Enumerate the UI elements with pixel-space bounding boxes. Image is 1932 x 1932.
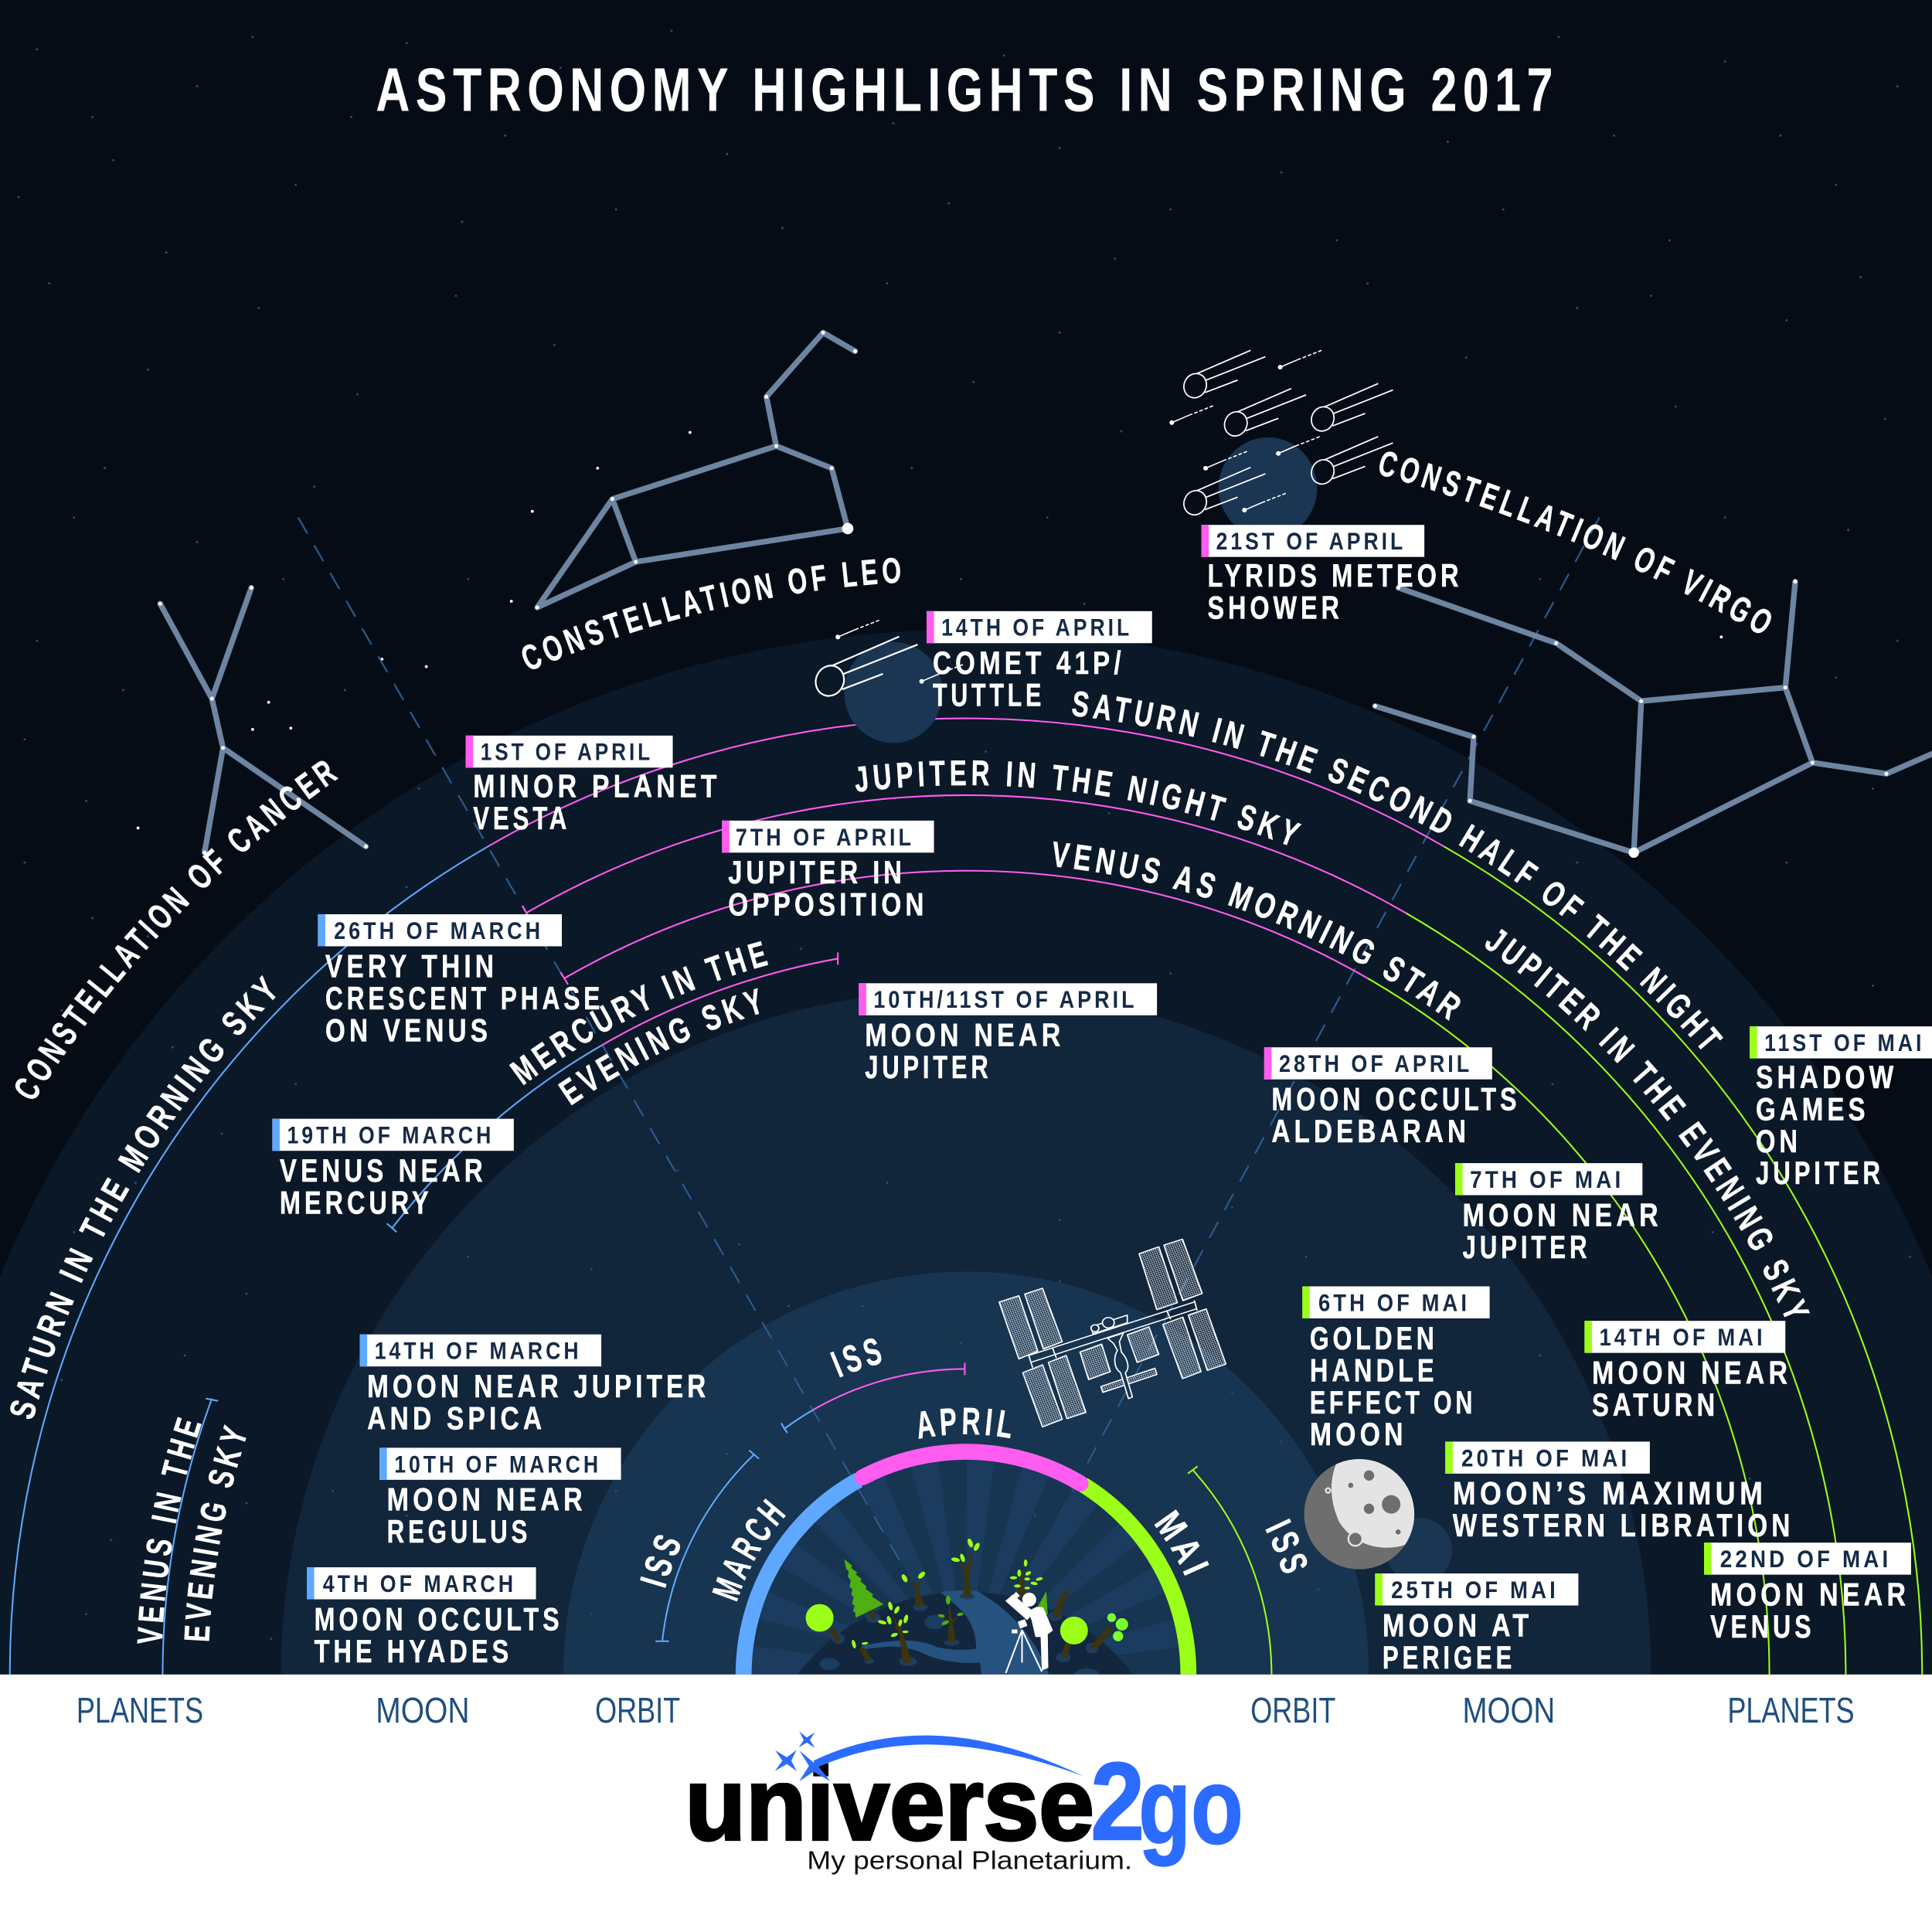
event: 7th of April: JUPITER IN xyxy=(728,854,906,890)
white footer area xyxy=(0,1675,1932,1932)
event: 7th of Mai xyxy=(1455,1163,1662,1265)
curved label: constellation of Virgo: CONSTELLATION OF VIRGO xyxy=(1379,451,1771,634)
title: ASTRONOMY HIGHLIGHTS IN SPRING 2017 xyxy=(376,55,1559,124)
curved label: Mercury evening sky, line one: MERCURY IN THE xyxy=(509,941,768,1085)
arc: Venus evening sky xyxy=(162,1399,218,1675)
logo tagline: My personal Planetarium. xyxy=(807,1847,1132,1876)
event: 10th/11st of April: JUPITER xyxy=(865,1049,992,1085)
event: 4th of March: MOON OCCULTS xyxy=(315,1600,563,1637)
event: 22nd of Mai: VENUS xyxy=(1710,1608,1815,1645)
event: 26th of March: VERY THIN xyxy=(325,947,498,984)
event: 25th of Mai: 25TH OF MAI xyxy=(1391,1576,1559,1604)
event: 25th of Mai: PERIGEE xyxy=(1383,1639,1515,1675)
ring: April xyxy=(862,1452,1080,1484)
event: 19th of March: 19TH OF MARCH xyxy=(287,1121,494,1149)
dashed month divider: April / May xyxy=(1032,518,1600,1565)
event: 10th/11st of April: 10TH/11ST OF APRIL xyxy=(873,985,1138,1013)
highlight disc: Lyrids radiant xyxy=(1219,437,1317,539)
event: 14th of March xyxy=(360,1335,709,1436)
event: 10th of March xyxy=(379,1447,621,1549)
event: 7th of April: OPPOSITION xyxy=(728,886,928,923)
arc: ISS May xyxy=(1188,1466,1271,1675)
event: 7th of Mai: 7TH OF MAI xyxy=(1470,1165,1624,1193)
event: 14th of Mai xyxy=(1584,1321,1791,1423)
event: 26th of March: CRESCENT PHASE xyxy=(325,980,604,1016)
event: 19th of March: MERCURY xyxy=(280,1184,433,1220)
event: 7th of April: 7TH OF APRIL xyxy=(736,823,914,851)
event: 28th of April: MOON OCCULTS xyxy=(1271,1081,1520,1117)
event: 20th of Mai: 20TH OF MAI xyxy=(1461,1444,1630,1471)
event: 10th/11st of April: MOON NEAR xyxy=(865,1017,1065,1053)
event: 11st of Mai: SHADOW xyxy=(1756,1059,1897,1095)
event: 22nd of Mai xyxy=(1704,1543,1911,1645)
logo: universe2go xyxy=(685,1732,1243,1876)
event: 7th of Mai: MOON NEAR xyxy=(1463,1196,1662,1233)
event: 11st of Mai: ON xyxy=(1756,1123,1801,1159)
axis label: moon left: MOON xyxy=(376,1690,469,1730)
curved label: Mercury evening sky, line two: EVENING SKY xyxy=(558,988,759,1105)
event: 14th of March: AND SPICA xyxy=(367,1400,546,1436)
event: 7th of Mai: JUPITER xyxy=(1463,1229,1590,1265)
constellation: Cancer xyxy=(160,588,366,852)
event: 28th of April: 28TH OF APRIL xyxy=(1279,1049,1472,1077)
moon shadow disc xyxy=(1386,1518,1452,1583)
event: 19th of March: VENUS NEAR xyxy=(280,1152,487,1189)
event: 22nd of Mai: 22ND OF MAI xyxy=(1720,1545,1891,1573)
curved label: ISS left: ISS xyxy=(640,1535,680,1588)
highlight disc: comet xyxy=(844,642,943,743)
month label: April: APRIL xyxy=(918,1408,1011,1439)
curved label: Venus evening sky, line one: VENUS IN THE xyxy=(138,1417,202,1644)
event: 26th of March xyxy=(318,914,604,1048)
constellation: Leo xyxy=(537,332,855,607)
logo go: go xyxy=(1138,1745,1243,1866)
sky band: planets xyxy=(0,630,1932,1675)
event: 6th of Mai xyxy=(1302,1287,1490,1452)
curved label: constellation of Leo: CONSTELLATION OF LEO xyxy=(522,558,900,669)
event: 11st of Mai xyxy=(1750,1026,1932,1191)
icon: moon xyxy=(1304,1453,1419,1570)
axis label: orbit left: ORBIT xyxy=(595,1690,680,1730)
event: 6th of Mai: HANDLE xyxy=(1310,1352,1438,1388)
logo wordmark: universe xyxy=(685,1747,1094,1862)
event: 20th of Mai xyxy=(1445,1441,1794,1543)
axis label: planets right: PLANETS xyxy=(1727,1690,1855,1730)
curved label: Saturn second half of night: SATURN IN THE SECOND HALF OF THE NIGHT xyxy=(1072,691,1723,1049)
event: 6th of Mai: EFFECT ON xyxy=(1310,1384,1476,1420)
event: 11st of Mai: GAMES xyxy=(1756,1090,1869,1127)
event: 20th of Mai: WESTERN LIBRATION xyxy=(1453,1507,1794,1543)
ring: March xyxy=(743,1480,859,1675)
event: 21st of April: LYRIDS METEOR xyxy=(1207,557,1463,594)
event: 4th of March xyxy=(307,1567,563,1669)
curved label: ISS top: ISS xyxy=(830,1338,881,1377)
curved label: Venus evening sky, line two: EVENING SKY xyxy=(184,1424,247,1641)
arc: Venus morning star xyxy=(560,871,1770,1675)
event: 14th of Mai: MOON NEAR xyxy=(1592,1354,1791,1390)
event: 11st of Mai: JUPITER xyxy=(1756,1155,1884,1191)
constellation: Virgo xyxy=(1375,582,1932,858)
arc: ISS April xyxy=(781,1362,964,1433)
axis label: orbit right: ORBIT xyxy=(1250,1690,1335,1730)
curved label: Venus morning star: VENUS AS MORNING STAR xyxy=(1053,841,1461,1021)
event: 10th of March: 10TH OF MARCH xyxy=(394,1450,601,1478)
event: 1st of April: MINOR PLANET xyxy=(473,768,721,804)
earth and observer scene xyxy=(798,1538,1133,1683)
event: 6th of Mai: MOON xyxy=(1310,1416,1407,1452)
month ring xyxy=(743,1452,1189,1675)
event: 6th of Mai: GOLDEN xyxy=(1310,1320,1438,1356)
event: 1st of April xyxy=(466,736,721,836)
month label: March: MARCH xyxy=(712,1498,786,1601)
ring: Mai xyxy=(1083,1485,1189,1675)
event: 25th of Mai xyxy=(1375,1573,1578,1675)
event: 21st of April xyxy=(1202,525,1463,625)
month label: Mai: MAI xyxy=(1155,1509,1209,1576)
earth xyxy=(798,1592,1133,1675)
trees xyxy=(806,1538,1128,1663)
observer with telescope xyxy=(1005,1592,1053,1673)
event: 14th of March: MOON NEAR JUPITER xyxy=(367,1368,709,1404)
event: 28th of April: ALDEBARAN xyxy=(1271,1113,1470,1149)
icon: Lyrids meteor shower xyxy=(1169,350,1393,519)
event: 6th of Mai: 6TH OF MAI xyxy=(1318,1288,1470,1316)
event: 14th of Mai: SATURN xyxy=(1592,1386,1719,1423)
curved label: ISS right: ISS xyxy=(1266,1518,1308,1573)
event: 14th of April: COMET 41P/ xyxy=(933,645,1125,681)
arc: Mercury xyxy=(387,952,838,1232)
radial rays around observer xyxy=(859,1567,1073,1781)
event: 14th of April xyxy=(927,611,1152,713)
event: 26th of March: 26TH OF MARCH xyxy=(334,917,543,944)
icon: comet 41P/Tuttle xyxy=(811,620,964,701)
event: 10th of March: REGULUS xyxy=(387,1513,531,1549)
dashed month divider: March / April xyxy=(298,518,906,1571)
event: 21st of April: 21ST OF APRIL xyxy=(1216,527,1406,555)
river xyxy=(862,1590,1049,1675)
arc: Saturn xyxy=(10,719,1922,1675)
sky band: moon xyxy=(281,989,1651,1675)
event: 26th of March: ON VENUS xyxy=(325,1012,492,1048)
event: 20th of Mai: MOON’S MAXIMUM xyxy=(1453,1475,1767,1512)
event: 14th of April: 14TH OF APRIL xyxy=(941,614,1132,641)
event: 14th of Mai: 14TH OF MAI xyxy=(1600,1323,1766,1351)
event: 14th of April: TUTTLE xyxy=(933,677,1045,713)
curved label: Jupiter evening sky: JUPITER IN THE EVENING SKY xyxy=(1485,929,1810,1317)
event: 1st of April: VESTA xyxy=(473,800,570,836)
event: 1st of April: 1ST OF APRIL xyxy=(481,738,653,766)
arc: Jupiter xyxy=(522,795,1845,1675)
arc: ISS March xyxy=(655,1451,759,1641)
axis label: planets left: PLANETS xyxy=(77,1690,203,1730)
event: 4th of March: 4TH OF MARCH xyxy=(323,1570,516,1597)
curved label: Saturn morning sky: SATURN IN THE MORNING SKY xyxy=(10,975,276,1419)
event: 28th of April xyxy=(1264,1047,1520,1149)
event: 4th of March: THE HYADES xyxy=(315,1633,512,1669)
logo number: 2 xyxy=(1090,1740,1145,1863)
ground blobs xyxy=(820,1594,1100,1683)
sky band: orbit xyxy=(563,1271,1369,1675)
logo swoosh and stars xyxy=(775,1732,1083,1781)
event: 14th of March: 14TH OF MARCH xyxy=(375,1337,582,1365)
event: 10th/11st of April xyxy=(859,983,1157,1085)
event: 10th of March: MOON NEAR xyxy=(387,1481,587,1518)
event: 7th of April xyxy=(722,821,934,923)
event: 21st of April: SHOWER xyxy=(1207,589,1343,625)
bright stars xyxy=(138,433,1721,850)
axis label: moon right: MOON xyxy=(1463,1690,1555,1730)
curved label: Jupiter night sky: JUPITER IN THE NIGHT SKY xyxy=(855,760,1301,845)
event: 25th of Mai: MOON AT xyxy=(1383,1607,1532,1643)
curved label: constellation of Cancer: CONSTELLATION OF CANCER xyxy=(15,760,338,1099)
icon: International Space Station xyxy=(999,1240,1226,1427)
event: 19th of March xyxy=(272,1119,514,1220)
